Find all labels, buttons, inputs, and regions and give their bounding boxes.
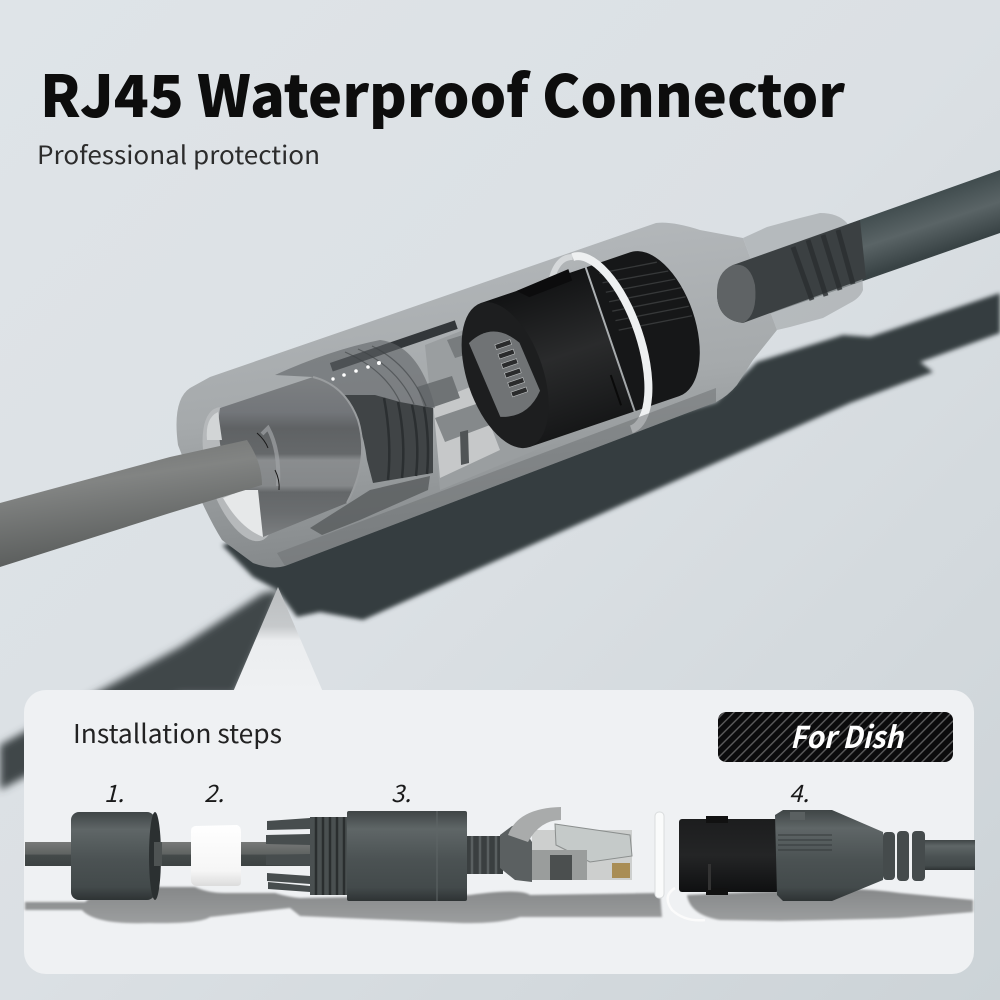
left end cap inner xyxy=(188,398,290,550)
lower collar mottling xyxy=(310,476,430,535)
end seal upper highlight xyxy=(207,412,222,440)
black ribbed rear xyxy=(587,239,717,411)
pale ring back edge xyxy=(542,256,580,290)
subtitle: Professional protection xyxy=(37,136,320,172)
strain relief sleeve xyxy=(743,213,863,330)
white seal seen through end xyxy=(223,490,263,537)
panel: installation steps xyxy=(24,690,975,974)
sleeve xyxy=(347,811,467,901)
badge: For Dish xyxy=(718,712,953,762)
gray nut xyxy=(219,377,362,537)
floor shadows xyxy=(25,887,973,923)
transparent O-ring xyxy=(655,812,664,898)
main illustration: transparent waterproof connector xyxy=(0,170,1000,567)
housing bottom band xyxy=(277,388,716,566)
black socket front xyxy=(443,264,634,459)
panel heading: Installation steps xyxy=(73,714,282,751)
white reflection arcs on floor xyxy=(668,888,705,920)
part 4: black connector with gland xyxy=(679,810,975,901)
cable: left side xyxy=(0,440,262,567)
badge: For Dish: For Dish xyxy=(790,713,905,757)
inner cable and ribs under sleeve xyxy=(717,220,866,323)
threaded collar: dark part xyxy=(343,395,433,483)
step 4 label: 4. xyxy=(789,774,809,809)
connector parts in axis coordinates xyxy=(179,225,722,563)
threaded collar: upper translucent part xyxy=(275,340,435,408)
interior between collar and socket xyxy=(417,310,560,490)
cable xyxy=(925,840,975,870)
cable through the parts xyxy=(25,842,310,866)
cast shadow of connector and cables xyxy=(0,293,1000,790)
white sealing ring xyxy=(573,245,667,429)
RJ45 plug xyxy=(500,807,632,882)
step 3 label: 3. xyxy=(391,774,411,809)
cone xyxy=(832,810,883,901)
callout pointer xyxy=(233,587,323,692)
part 1: gland nut xyxy=(71,812,162,900)
fingers xyxy=(266,818,310,892)
step 1 label: 1. xyxy=(104,774,124,809)
black barrel xyxy=(679,819,779,892)
part 3: gland body xyxy=(266,811,503,901)
boot ribs xyxy=(883,831,925,881)
cable: right side xyxy=(733,170,1000,323)
corrugated boot xyxy=(467,836,503,874)
title: RJ45 Waterproof Connector xyxy=(40,50,845,134)
part 2: white seal xyxy=(191,825,241,886)
dark latch strip xyxy=(330,320,458,371)
nut xyxy=(775,810,832,901)
thread xyxy=(310,817,348,895)
contact highlights xyxy=(331,361,381,381)
housing: transparent shell xyxy=(176,223,777,567)
step 2 label: 2. xyxy=(204,774,224,809)
